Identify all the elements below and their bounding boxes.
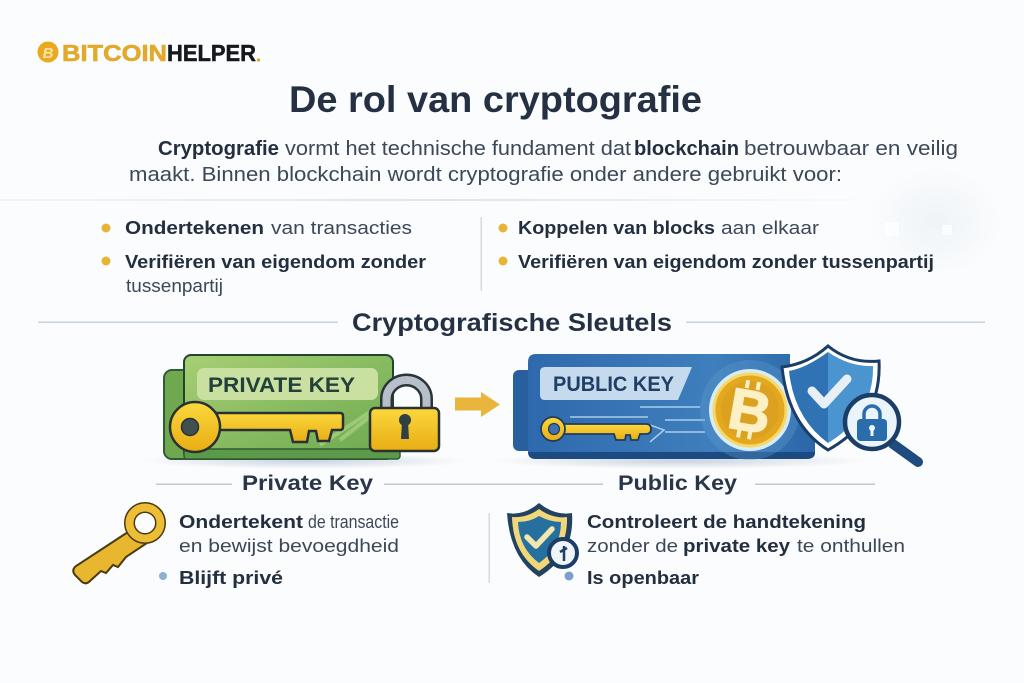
- shield: [782, 346, 879, 450]
- public key description: private key: [683, 536, 790, 556]
- public key description: zonder de: [587, 536, 678, 556]
- bitcoin coin: B: [723, 376, 776, 447]
- gold key: [541, 417, 651, 441]
- magnifier with lock: [845, 395, 918, 462]
- divider: [0, 199, 900, 201]
- logo: Bitcoin Helper: HELPER: [167, 40, 256, 66]
- icon: shield with magnifier: [507, 503, 577, 577]
- title: De rol van cryptografie: [289, 79, 702, 120]
- bullet list: left: Verifiëren van eigendom zonder: [125, 252, 426, 272]
- section heading: Cryptografische Sleutels: Cryptografische Sleutels: [352, 309, 672, 337]
- private key description: en bewijst bevoegdheid: [179, 536, 399, 556]
- decorative network haze: [867, 166, 1003, 278]
- logo: Bitcoin Helper: B: [43, 45, 54, 62]
- logo: Bitcoin Helper: BITCOIN: [62, 40, 167, 66]
- bullet list: right: aan elkaar: [721, 218, 819, 238]
- intro text: Cryptografie: [158, 138, 279, 160]
- intro text: blockchain: [634, 138, 739, 160]
- arrow: [455, 392, 500, 417]
- label: Public Key: Public Key: [618, 472, 737, 495]
- public key description: [564, 512, 905, 588]
- intro text: maakt. Binnen blockchain wordt cryptografie onder andere gebruikt voor:: [129, 164, 842, 186]
- gold key: [170, 402, 343, 452]
- illustration: private key card: PRIVATE KEY: [208, 374, 355, 397]
- illustration: public key card: [490, 346, 918, 469]
- intro text: betrouwbaar en veilig: [744, 138, 958, 160]
- illustration: private key card: [140, 355, 470, 469]
- bullet list: left: [102, 218, 426, 296]
- column divider: [488, 513, 490, 583]
- bullet list: left: van transacties: [271, 218, 412, 238]
- intro text: [129, 138, 958, 186]
- public key description: Is openbaar: [587, 568, 699, 588]
- bullet list: right: Verifiëren van eigendom zonder tussenpartij: [518, 252, 934, 272]
- column divider: [480, 217, 482, 291]
- private key description: [159, 512, 399, 588]
- bitcoin coin: [709, 369, 791, 451]
- public key description: Controleert de handtekening: [587, 512, 866, 532]
- padlock: [370, 380, 439, 451]
- bullet list: left: Ondertekenen: [125, 218, 264, 238]
- bullet list: right: [498, 218, 934, 272]
- bullet list: left: tussenpartij: [126, 276, 223, 296]
- intro text: vormt het technische fundament dat: [285, 138, 631, 160]
- public key description: te onthullen: [797, 536, 905, 556]
- logo: Bitcoin Helper: [38, 40, 260, 66]
- connecting line: [384, 484, 603, 485]
- bullet list: right: Koppelen van blocks: [518, 218, 715, 238]
- icon: gold key: [73, 508, 160, 583]
- private key description: Ondertekent: [179, 512, 303, 532]
- illustration: public key card: PUBLIC KEY: [553, 373, 674, 396]
- private key description: Blijft privé: [179, 568, 283, 588]
- label: Private Key: Private Key: [242, 472, 373, 495]
- private key description: de transactie: [308, 512, 399, 532]
